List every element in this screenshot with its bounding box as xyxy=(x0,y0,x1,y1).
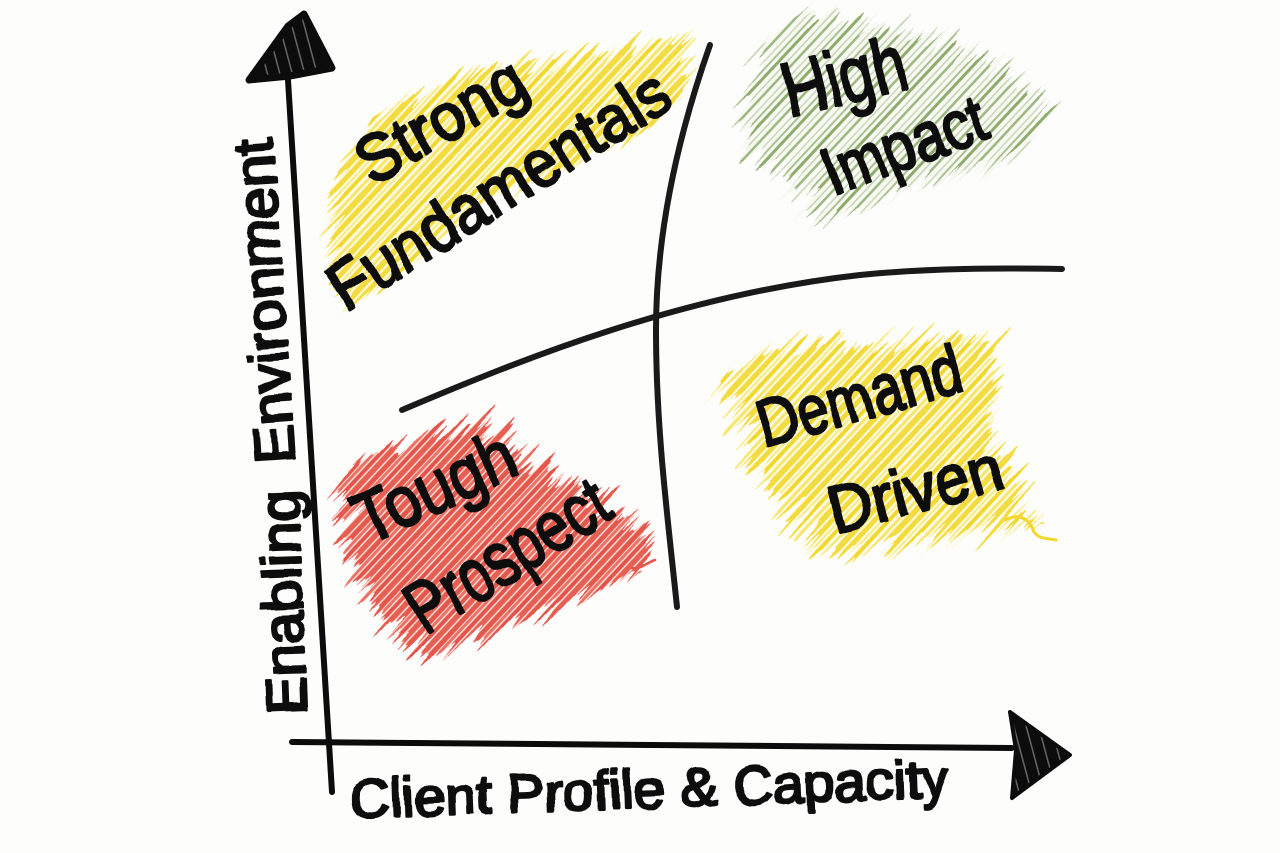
horizontal quadrant divider xyxy=(402,269,1062,410)
y axis label: Environment xyxy=(221,137,307,466)
y axis label xyxy=(221,137,318,716)
icon: red scribble tail xyxy=(632,560,655,568)
quadrant label: demand driven: Driven xyxy=(819,430,1011,548)
quadrant label: demand driven: Demand xyxy=(748,331,971,462)
quadrant label: tough prospect: Tough xyxy=(341,415,529,560)
quadrant label: tough prospect xyxy=(341,415,625,650)
patch: high impact green hatching xyxy=(639,0,1153,376)
y axis with arrow xyxy=(249,14,332,792)
icon: x axis arrowhead xyxy=(1010,712,1070,798)
quadrant label: high impact xyxy=(773,19,997,210)
quadrant label: strong fundamentals: Strong xyxy=(342,42,539,198)
quadrant label: demand driven xyxy=(748,331,1011,548)
quadrant label: tough prospect: Prospect xyxy=(389,460,625,650)
quadrant label: high impact: High xyxy=(773,19,915,134)
patch: demand driven yellow hatching xyxy=(616,178,1148,710)
x axis with arrow xyxy=(292,712,1070,798)
patch: tough prospect red hatching xyxy=(219,267,764,811)
quadrant label: strong fundamentals: Fundamentals xyxy=(313,54,683,324)
icon: yellow scribble tail xyxy=(1005,517,1056,540)
x axis label: Client Profile & Capacity xyxy=(348,749,950,830)
icon: y axis arrowhead xyxy=(249,14,332,80)
patch: strong fundamentals yellow hatching xyxy=(197,0,825,489)
y axis label: Enabling xyxy=(247,489,318,716)
vertical quadrant divider xyxy=(656,45,710,607)
quadrant label: high impact: Impact xyxy=(811,81,997,210)
